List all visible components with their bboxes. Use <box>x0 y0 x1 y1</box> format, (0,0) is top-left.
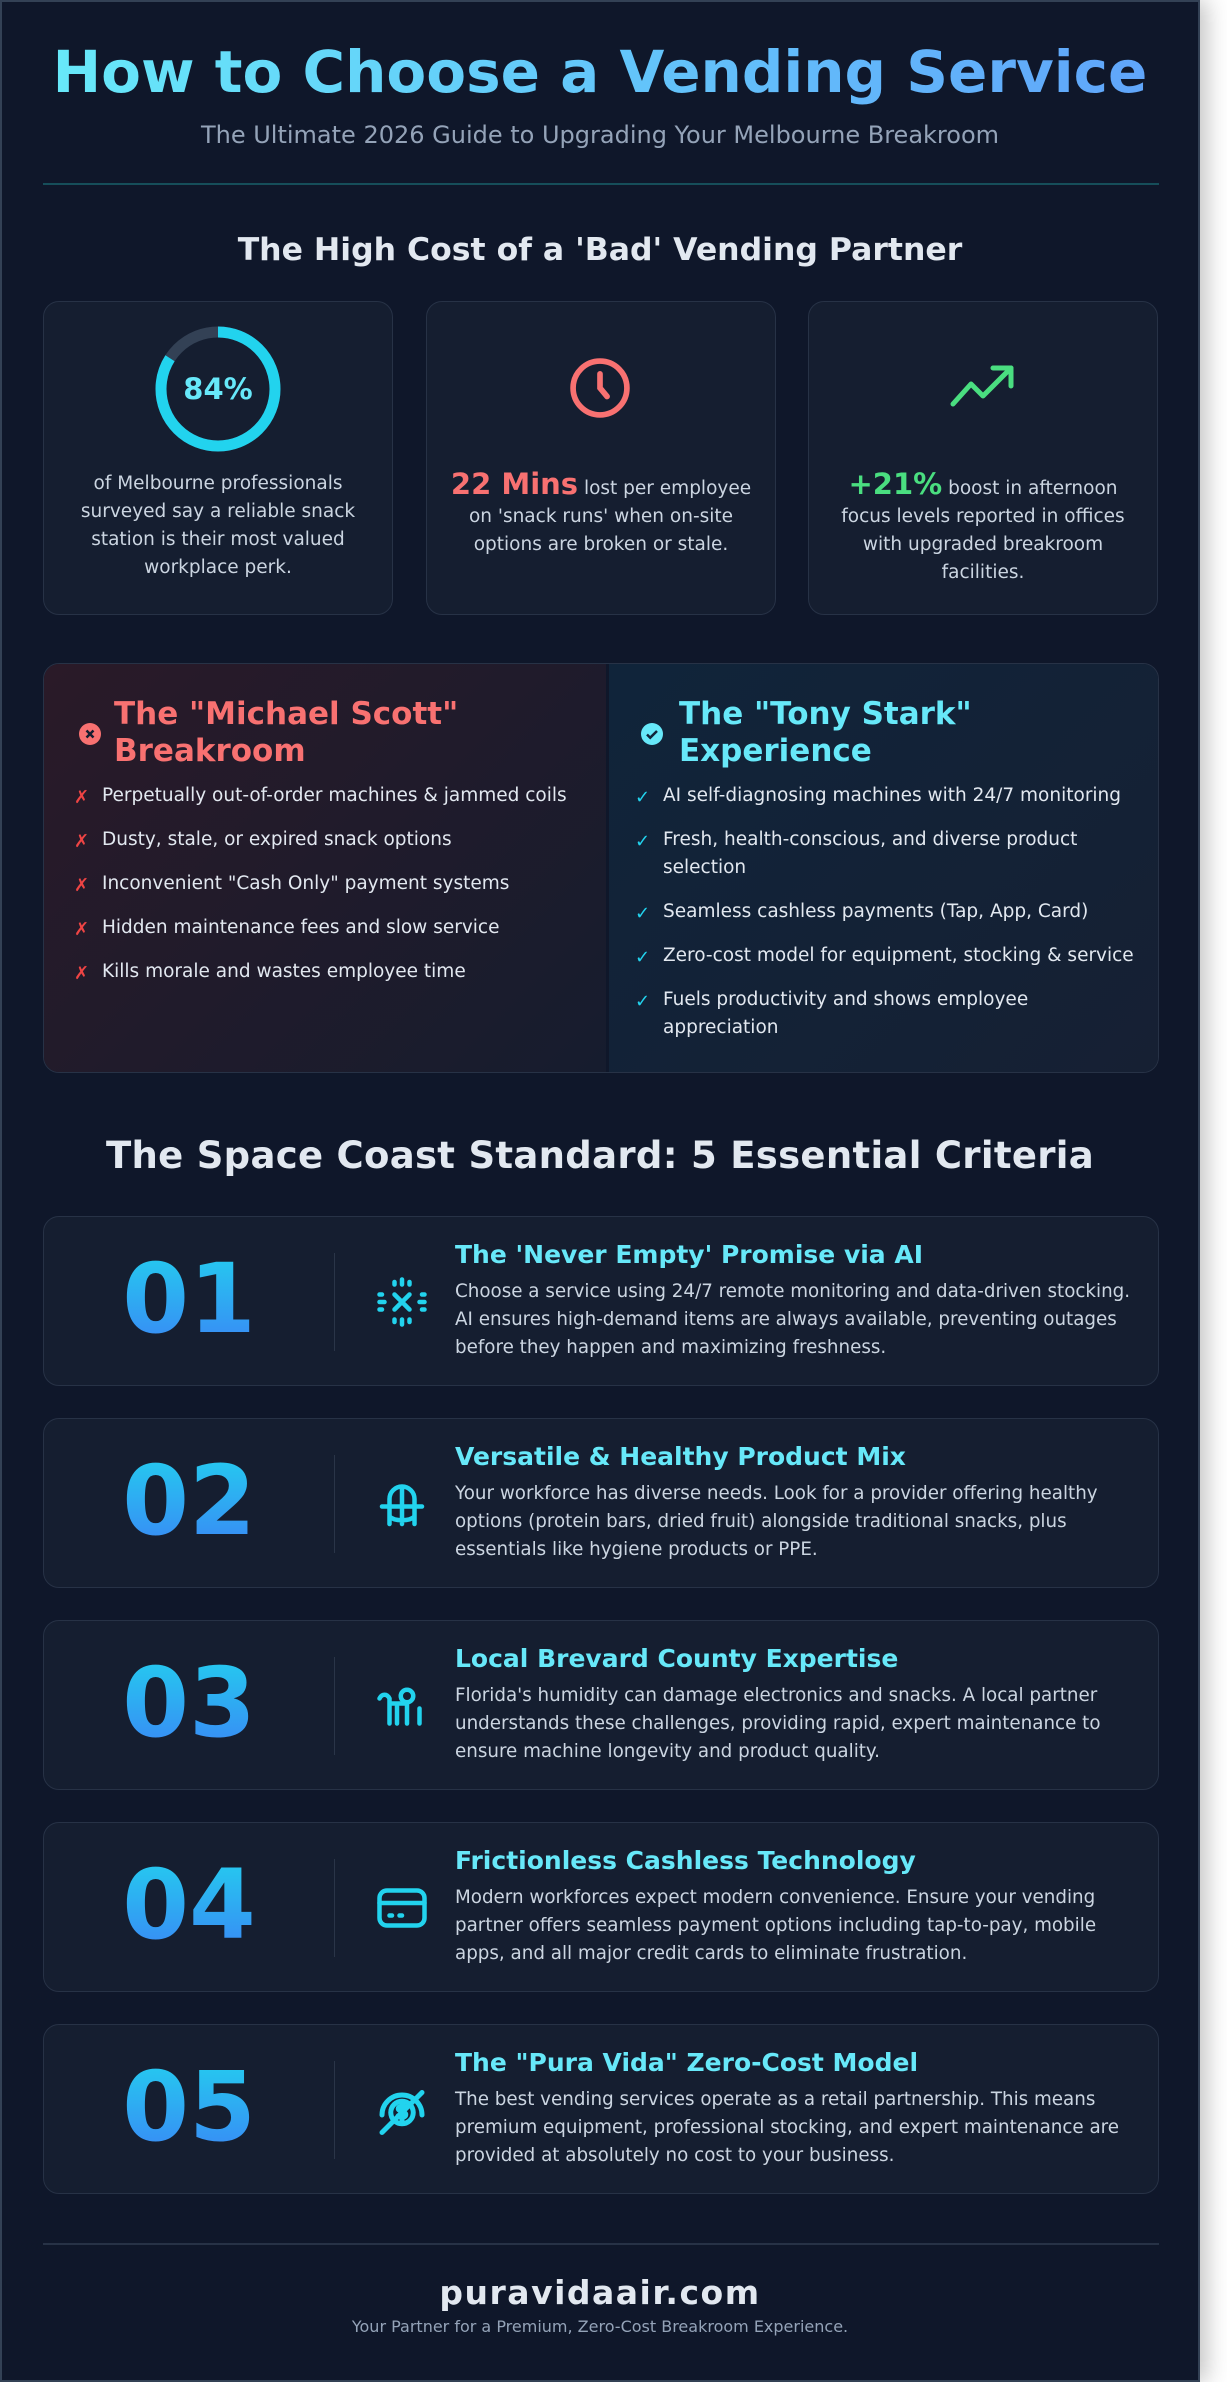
ring chart <box>156 326 280 452</box>
criterion 04: Frictionless Cashless Technology <box>455 1846 916 1875</box>
panel: michael scott: ✗ <box>74 831 89 852</box>
icon: no cost <box>380 2090 424 2135</box>
panel: tony stark: ✓ <box>635 831 650 852</box>
stat card: +21% <box>808 301 1158 615</box>
criterion 01: Choose a service using 24/7 remote monitoring and data-driven stocking. <box>455 1281 1130 1302</box>
criterion 03: Local Brevard County Expertise <box>455 1644 898 1673</box>
criterion 02 <box>43 1418 1159 1588</box>
heading: michael scott <box>79 696 458 769</box>
criterion 01: The 'Never Empty' Promise via AI <box>455 1240 923 1269</box>
list: good: Seamless cashless payments (Tap, App, Card) <box>663 901 1088 922</box>
list: bad: Inconvenient "Cash Only" payment systems <box>102 873 509 894</box>
icon: clock <box>570 358 630 418</box>
stat text: of Melbourne professionals surveyed say a reliable snack station is their most valued workplace perk. <box>81 473 355 578</box>
criterion 03: ensure machine longevity and product quality. <box>455 1741 880 1762</box>
panel: tony stark: ✓ <box>635 903 650 924</box>
criterion 03: Florida's humidity can damage electronics and snacks. A local partner <box>455 1685 1097 1706</box>
criterion 05: provided at absolutely no cost to your business. <box>455 2145 894 2166</box>
criterion 02: Your workforce has diverse needs. Look for a provider offering healthy <box>455 1483 1098 1504</box>
criterion 05 <box>43 2024 1159 2194</box>
panel: tony stark <box>606 664 1160 1074</box>
criterion 02: options (protein bars, dried fruit) alongside traditional snacks, plus <box>455 1511 1067 1532</box>
criterion 03 <box>43 1620 1159 1790</box>
heading: tony stark: The "Tony Stark" <box>679 696 972 732</box>
panel: michael scott: ✗ <box>74 875 89 896</box>
subtitle: The Ultimate 2026 Guide to Upgrading Your Melbourne Breakroom <box>201 121 999 149</box>
criterion 02: Versatile & Healthy Product Mix <box>455 1442 906 1471</box>
list: good: AI self-diagnosing machines with 24/7 monitoring <box>663 785 1121 806</box>
criterion 04: apps, and all major credit cards to eliminate frustration. <box>455 1943 967 1964</box>
criterion 04 <box>43 1822 1159 1992</box>
list: good <box>635 785 1134 1038</box>
criterion 01: 01 <box>122 1243 256 1355</box>
list: bad <box>74 785 567 984</box>
stat card: 84% <box>43 301 393 615</box>
icon: local <box>377 1688 422 1726</box>
icon: card <box>377 1888 427 1928</box>
criterion 01: before they happen and maximizing freshness. <box>455 1337 886 1358</box>
criterion 04: Modern workforces expect modern convenience. Ensure your vending <box>455 1887 1095 1908</box>
ring chart: 84% <box>183 372 253 406</box>
list: good: Zero-cost model for equipment, stocking & service <box>663 945 1134 966</box>
stat text: +21% boost in afternoon focus levels reported in offices with upgraded breakroom facilities. <box>841 467 1125 583</box>
panel: michael scott: ✗ <box>74 919 89 940</box>
title: How to Choose a Vending Service <box>53 38 1147 106</box>
criterion 05: 05 <box>122 2051 256 2163</box>
list: bad: Dusty, stale, or expired snack options <box>102 829 452 850</box>
icon: trend up <box>950 366 1014 406</box>
heading: michael scott: Breakroom <box>114 733 306 769</box>
list: bad: Perpetually out-of-order machines & jammed coils <box>102 785 567 806</box>
footer brand: puravidaair.com <box>439 2273 761 2312</box>
panel: tony stark: ✓ <box>635 787 650 808</box>
panel: michael scott <box>44 664 606 1074</box>
criterion 04: 04 <box>122 1849 256 1961</box>
heading: criteria: The Space Coast Standard: 5 Essential Criteria <box>106 1134 1094 1177</box>
panel: tony stark: ✓ <box>635 947 650 968</box>
heading: high cost: The High Cost of a 'Bad' Vending Partner <box>238 232 962 268</box>
list: good: Fresh, health-conscious, and diverse product selection <box>663 829 1077 878</box>
list: bad: Hidden maintenance fees and slow service <box>102 917 499 938</box>
panel: michael scott: ✗ <box>74 963 89 984</box>
criterion 04: partner offers seamless payment options including tap-to-pay, mobile <box>455 1915 1096 1936</box>
stat card: 22 mins <box>426 301 776 615</box>
criterion 03: understands these challenges, providing rapid, expert maintenance to <box>455 1713 1101 1734</box>
stat text: 22 Mins lost per employee on 'snack runs' when on-site options are broken or stale. <box>451 467 751 555</box>
list: bad: Kills morale and wastes employee time <box>102 961 466 982</box>
criterion 02: 02 <box>122 1445 256 1557</box>
panel: michael scott: ✗ <box>74 787 89 808</box>
criterion 03: 03 <box>122 1647 256 1759</box>
heading: tony stark: Experience <box>679 733 872 769</box>
icon: ai <box>377 1277 427 1327</box>
panel: tony stark: ✓ <box>635 991 650 1012</box>
icon: product <box>380 1484 424 1526</box>
criterion 01 <box>43 1216 1159 1386</box>
heading: michael scott: The "Michael Scott" <box>114 696 458 732</box>
comparison panels <box>43 663 1159 1073</box>
criterion 01: AI ensures high-demand items are always available, preventing outages <box>455 1309 1117 1330</box>
criterion 02: essentials like hygiene products or PPE. <box>455 1539 818 1560</box>
list: good: Fuels productivity and shows employee appreciation <box>663 989 1028 1038</box>
criterion 05: The best vending services operate as a retail partnership. This means <box>455 2089 1095 2110</box>
heading: tony stark <box>641 696 972 769</box>
criterion 05: The "Pura Vida" Zero-Cost Model <box>455 2048 918 2077</box>
criterion 05: premium equipment, professional stocking, and expert maintenance are <box>455 2117 1119 2138</box>
footer tagline: Your Partner for a Premium, Zero-Cost Breakroom Experience. <box>352 2317 848 2336</box>
